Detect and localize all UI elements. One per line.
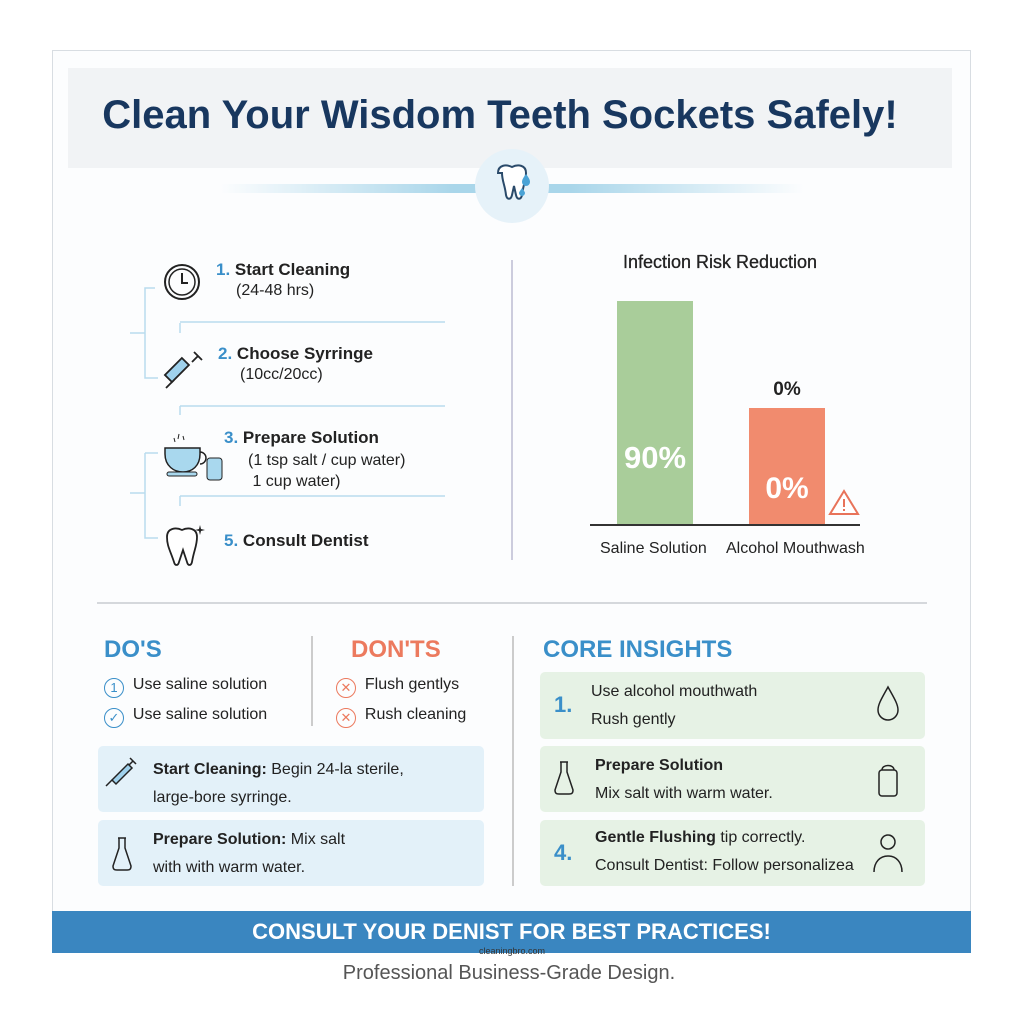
panel: don'ts: DON'TS: [351, 636, 441, 663]
insight 4: Consult Dentist: Follow personalizea: [595, 857, 854, 874]
insight 4: [540, 820, 925, 886]
step 2: 2. Choose Syrringe: [218, 344, 373, 363]
insight 1: [540, 672, 925, 739]
vertical divider: [511, 260, 512, 560]
callout: prepare solution: with with warm water.: [153, 859, 305, 876]
panel: do's: Use saline solution: [133, 706, 267, 723]
step 3: 1 cup water): [252, 473, 340, 490]
header divider with icon: [243, 149, 780, 223]
step 1: (24-48 hrs): [236, 282, 314, 299]
step 3: (1 tsp salt / cup water): [248, 452, 405, 469]
bar chart: [590, 252, 865, 557]
bar chart: 0%: [773, 379, 801, 400]
panel: steps: [130, 260, 445, 566]
insight 2: Mix salt with warm water.: [595, 785, 773, 802]
footer banner: CONSULT YOUR DENIST FOR BEST PRACTICES!: [252, 919, 771, 944]
connector lines: [130, 287, 445, 539]
step 2: (10cc/20cc): [240, 366, 323, 383]
insight 4: 4.: [554, 840, 572, 865]
insight 2: [540, 746, 925, 812]
bar chart: Alcohol Mouthwash: [726, 540, 865, 557]
step 2: [164, 344, 373, 389]
step 1: [164, 260, 350, 300]
outer frame: [52, 50, 971, 953]
insight 1: Use alcohol mouthwath: [591, 683, 757, 700]
panel: don'ts: Rush cleaning: [365, 706, 466, 723]
step 3: [164, 428, 405, 490]
callout: start cleaning: [98, 746, 484, 812]
bar chart: 0%: [765, 472, 809, 505]
panel: don'ts: Flush gentlys: [365, 676, 459, 693]
panel: do's: ✓: [109, 710, 119, 725]
panel: do's: Use saline solution: [133, 676, 267, 693]
panel: core insights: [540, 636, 925, 886]
panel: do's: DO'S: [104, 636, 162, 663]
watermark: cleaningbro.com: [479, 946, 545, 956]
title band: [68, 68, 952, 168]
insight 1: Rush gently: [591, 711, 676, 728]
callout: start cleaning: large-bore syrringe.: [153, 789, 292, 806]
panel: don'ts: ✕: [341, 680, 351, 695]
panel: don'ts: [336, 636, 466, 728]
insight 2: Prepare Solution: [595, 757, 723, 774]
title band: Clean Your Wisdom Teeth Sockets Safely!: [102, 93, 898, 137]
footer banner: [52, 911, 971, 953]
icon: tooth with drop: [475, 149, 549, 223]
callout: prepare solution: [98, 820, 484, 886]
callout: start cleaning: Start Cleaning: Begin 24-la sterile,: [153, 761, 404, 778]
panel: don'ts: ✕: [341, 710, 351, 725]
step 5: [166, 525, 369, 566]
step 5: 5. Consult Dentist: [224, 531, 369, 550]
insight 1: 1.: [554, 692, 572, 717]
panel: core insights: CORE INSIGHTS: [543, 636, 732, 663]
bar chart: 90%: [624, 440, 686, 475]
insight 4: Gentle Flushing tip correctly.: [595, 829, 805, 846]
bar chart: Infection Risk Reduction: [623, 252, 817, 272]
step 1: 1. Start Cleaning: [216, 260, 350, 279]
panel: do's: [104, 636, 267, 728]
bar chart: Saline Solution: [600, 540, 707, 557]
panel: do's: 1: [110, 680, 118, 695]
horizontal divider: [97, 602, 927, 604]
tagline: Professional Business-Grade Design.: [343, 962, 675, 984]
step 3: 3. Prepare Solution: [224, 428, 379, 447]
callout: prepare solution: Prepare Solution: Mix salt: [153, 831, 345, 848]
